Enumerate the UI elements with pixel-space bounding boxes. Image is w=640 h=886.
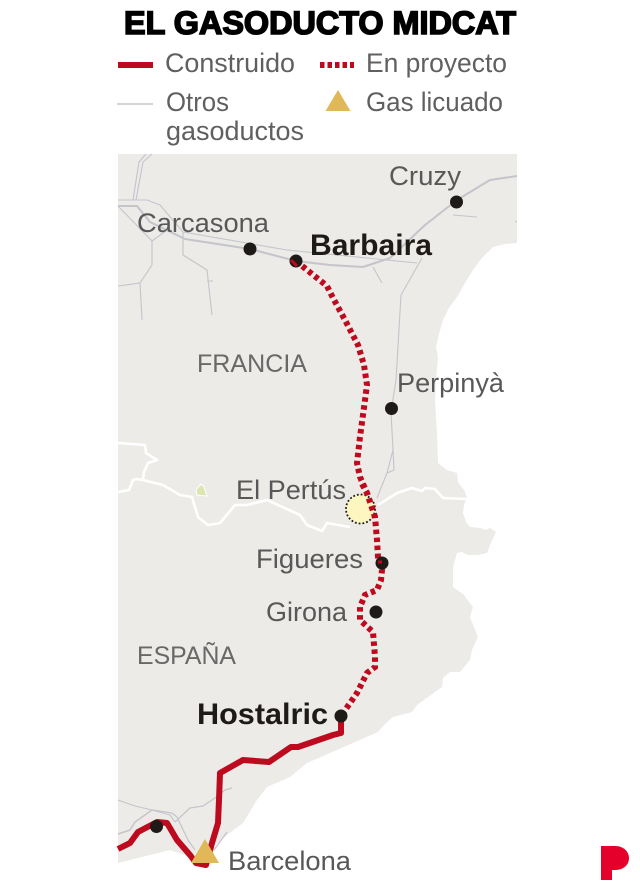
icon: liquefied gas triangle — [191, 839, 219, 863]
place labels: Cruzy — [389, 161, 462, 191]
place labels: FRANCIA — [197, 350, 307, 378]
legend: other pipelines — [117, 87, 304, 146]
place labels: Girona — [266, 597, 348, 627]
legend: built line: Construido — [165, 48, 295, 78]
city dots — [150, 196, 463, 833]
planned pipeline over circle — [362, 484, 375, 517]
other pipelines — [118, 154, 517, 850]
legend — [117, 48, 507, 146]
place labels: Carcasona — [137, 208, 270, 238]
place labels: Perpinyà — [397, 368, 505, 398]
built pipeline — [118, 716, 341, 865]
dashes over dots — [291, 260, 382, 562]
place labels — [137, 161, 505, 876]
logo — [601, 846, 629, 880]
place labels: Barcelona — [228, 846, 352, 876]
legend: liquefied gas: Gas licuado — [366, 87, 503, 117]
planned pipeline — [296, 261, 382, 716]
legend: other pipelines: Otros — [166, 87, 229, 117]
legend: planned line: En proyecto — [366, 48, 507, 78]
place labels: Barbaira — [310, 229, 432, 262]
place labels: Figueres — [256, 544, 363, 574]
El Pertús circle — [346, 494, 375, 524]
place labels: Hostalric — [197, 698, 328, 731]
small enclave — [196, 484, 207, 496]
border — [118, 443, 467, 531]
place labels: ESPAÑA — [137, 641, 236, 670]
map — [118, 154, 517, 876]
place labels: El Pertús — [236, 475, 346, 505]
land — [118, 154, 517, 866]
title: EL GASODUCTO MIDCAT — [124, 5, 516, 41]
legend: other pipelines: gasoductos — [166, 116, 304, 146]
